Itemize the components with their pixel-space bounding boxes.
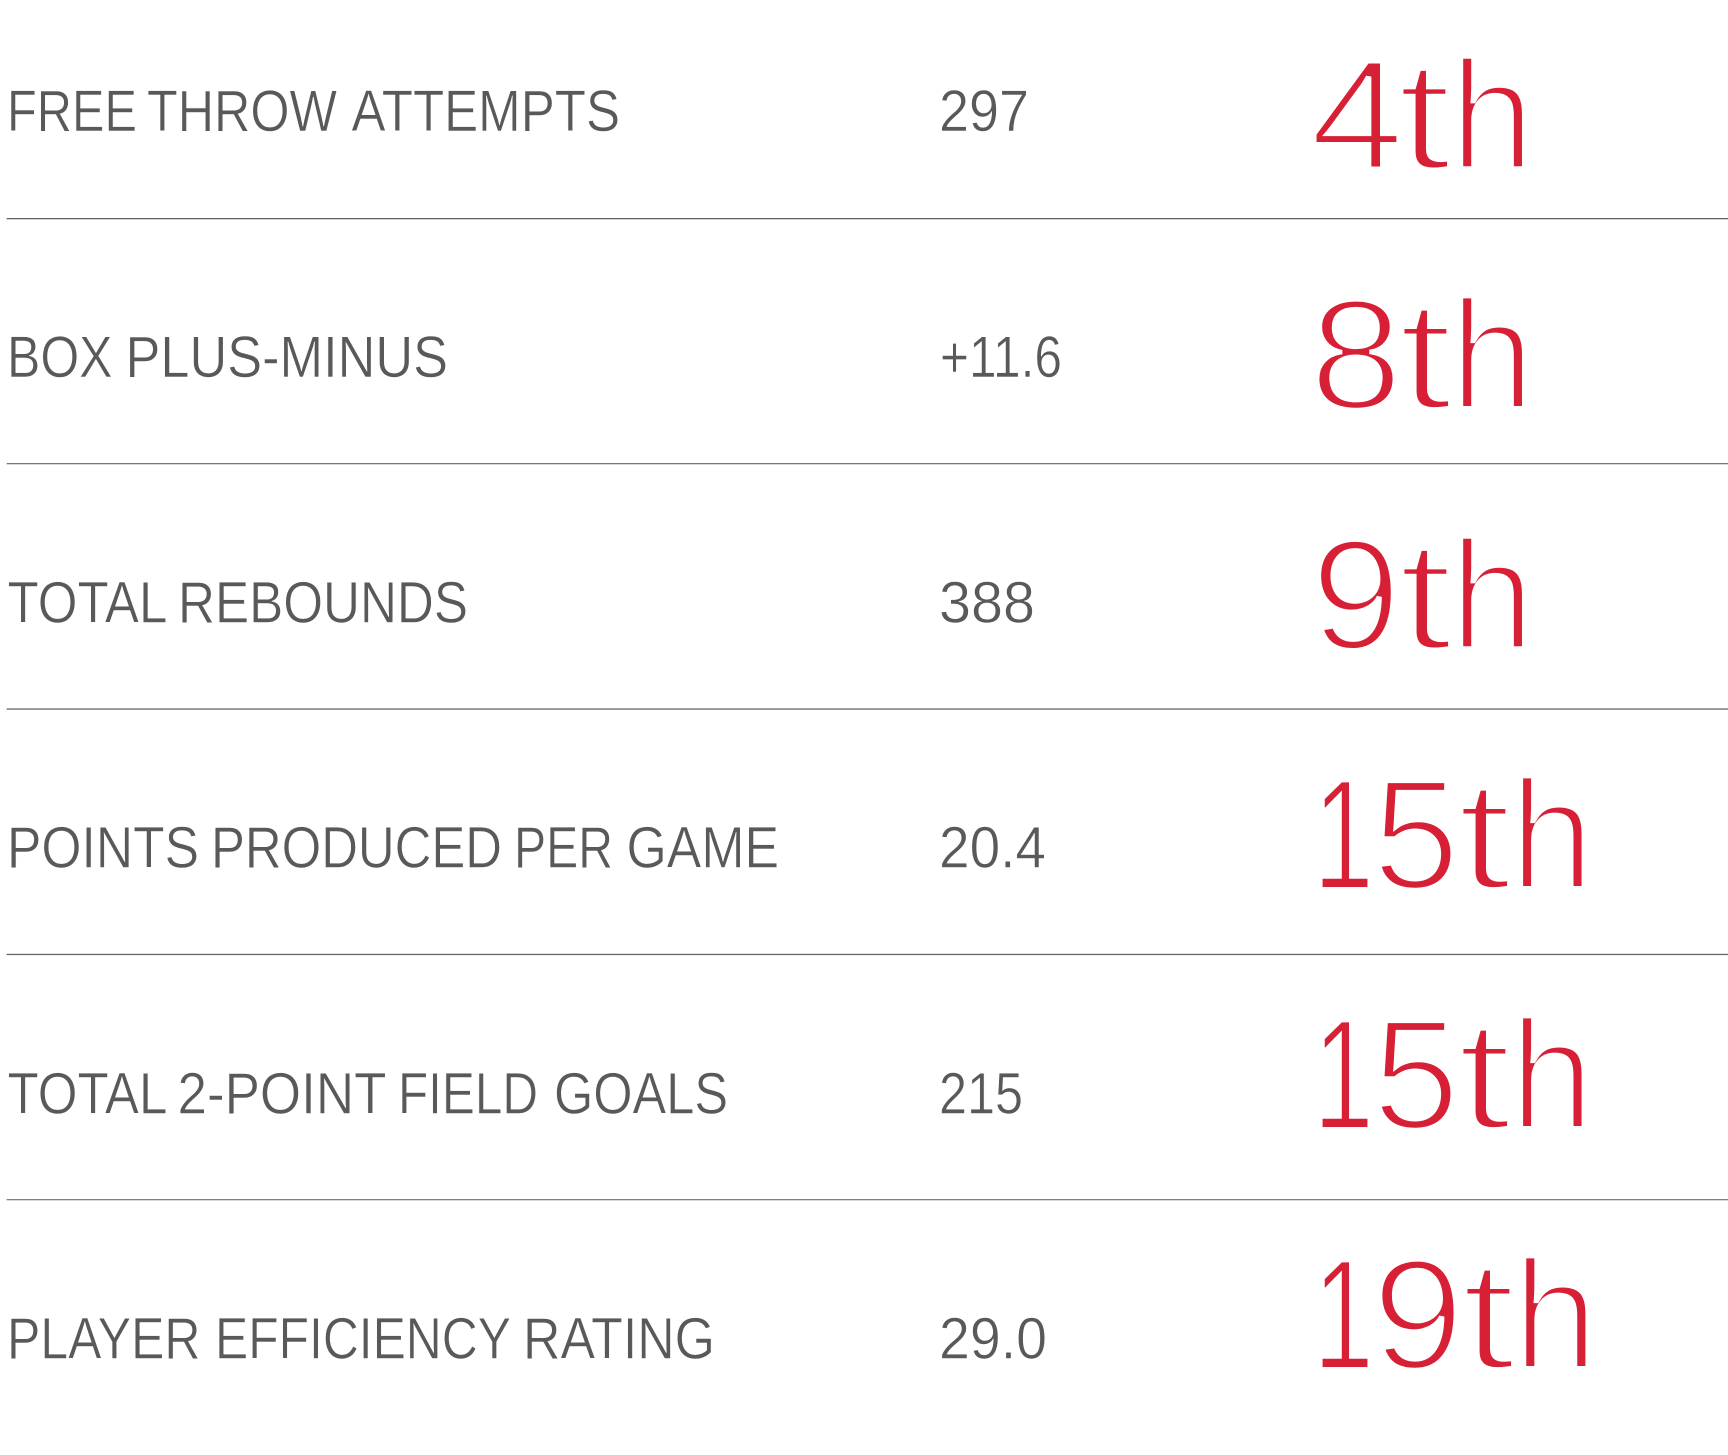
stat label: FREE (7, 79, 137, 144)
stat label: TOTAL (8, 1061, 166, 1126)
stat value: 388 (939, 570, 1035, 635)
rank: h (1510, 749, 1594, 923)
rank: 9 (1311, 508, 1401, 683)
stat value: +11.6 (940, 325, 1062, 390)
stat label: GAME (626, 815, 779, 880)
stat label: TOTAL (8, 570, 166, 635)
rank: 1 (1313, 1228, 1374, 1403)
stat label: PLAYER (7, 1306, 200, 1371)
rank: t (1457, 749, 1512, 923)
row: free throw attempts (7, 28, 1534, 203)
rank: 5 (1372, 988, 1460, 1163)
stat label: BOX (7, 325, 112, 390)
stat label: PRODUCED (211, 815, 502, 880)
rank: 1 (1313, 988, 1374, 1163)
stat value: 215 (939, 1061, 1023, 1126)
rank: 8 (1310, 268, 1402, 443)
stat label: PLUS-MINUS (126, 325, 448, 390)
rank: t (1398, 269, 1453, 443)
stat value: 29.0 (939, 1306, 1047, 1371)
stat label: FIELD (398, 1061, 538, 1126)
rank: t (1461, 1229, 1516, 1403)
rank: h (1450, 509, 1534, 683)
rank: 4 (1310, 28, 1404, 203)
rank: 1 (1313, 748, 1374, 923)
rank: t (1398, 509, 1453, 683)
rank: h (1450, 29, 1534, 203)
stat label: GOALS (554, 1061, 728, 1126)
stat value: 20.4 (939, 815, 1046, 880)
row: player efficiency rating (7, 1228, 1598, 1403)
rank: t (1397, 29, 1452, 203)
rank: h (1510, 989, 1594, 1163)
row: points produced per game (7, 748, 1594, 923)
row: total 2-point field goals (8, 988, 1594, 1163)
row: box plus-minus (7, 268, 1534, 443)
stat value: 297 (939, 79, 1029, 144)
rank: h (1450, 269, 1534, 443)
stat label: POINTS (7, 815, 199, 880)
stat label: REBOUNDS (178, 570, 468, 635)
stat label: EFFICIENCY (215, 1306, 510, 1371)
stat label: ATTEMPTS (352, 79, 620, 144)
stat label: PER (514, 815, 613, 880)
row: total rebounds (8, 508, 1534, 683)
rank: t (1457, 989, 1512, 1163)
stat label: 2-POINT (178, 1061, 386, 1126)
rank: h (1513, 1229, 1598, 1403)
rank: 5 (1372, 748, 1460, 923)
stat label: RATING (523, 1306, 715, 1371)
stat label: THROW (147, 79, 337, 144)
rank: 9 (1372, 1228, 1464, 1403)
